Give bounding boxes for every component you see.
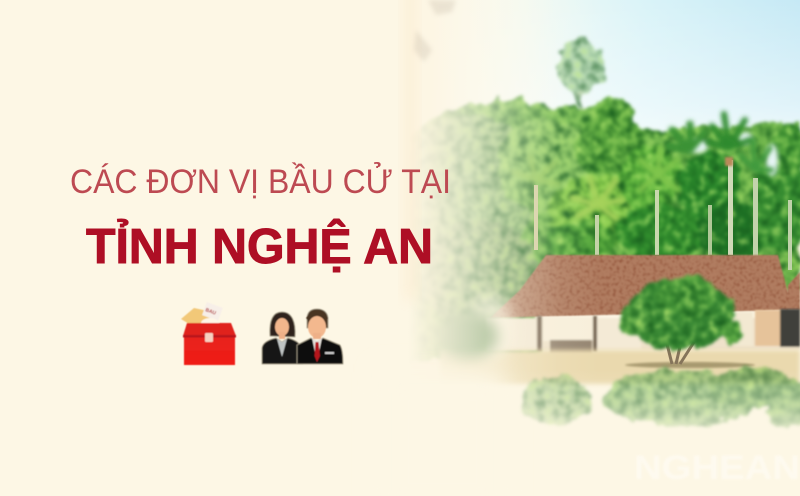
title line 2: TỈNH NGHỆ AN — [86, 218, 433, 274]
ground — [440, 350, 800, 384]
corner fade overlay — [380, 372, 505, 496]
title line 1: CÁC ĐƠN VỊ BẦU CỬ TẠI — [70, 161, 451, 201]
sky — [400, 0, 800, 210]
forest background — [400, 98, 800, 360]
tall pale tree — [557, 38, 603, 120]
house: second roof — [786, 272, 800, 310]
house: thatched roof — [490, 255, 790, 318]
bottom fade overlay — [400, 370, 800, 496]
icon: ballot box — [181, 302, 236, 365]
soft fade over the house's left end — [468, 294, 512, 362]
dark blurred bush at fade edge — [433, 312, 497, 360]
palm crowns — [514, 114, 772, 218]
man — [297, 309, 343, 364]
icon: delegates — [262, 309, 343, 364]
house: walls — [486, 309, 800, 354]
warm edge glow — [404, 0, 416, 300]
palm trees — [514, 114, 792, 270]
lock — [205, 333, 213, 342]
hedges — [520, 368, 800, 428]
box body — [184, 337, 235, 365]
ballot paper: BAU — [204, 307, 217, 317]
woman — [262, 312, 303, 364]
hand — [181, 308, 218, 327]
watermark: NGHEAN — [634, 449, 800, 487]
sky gaps between palms — [688, 132, 778, 176]
photo: Kim Lien village scene — [400, 0, 800, 428]
statue fragment at top — [414, 0, 456, 62]
shrub tree — [620, 276, 740, 364]
box lid — [183, 323, 236, 336]
